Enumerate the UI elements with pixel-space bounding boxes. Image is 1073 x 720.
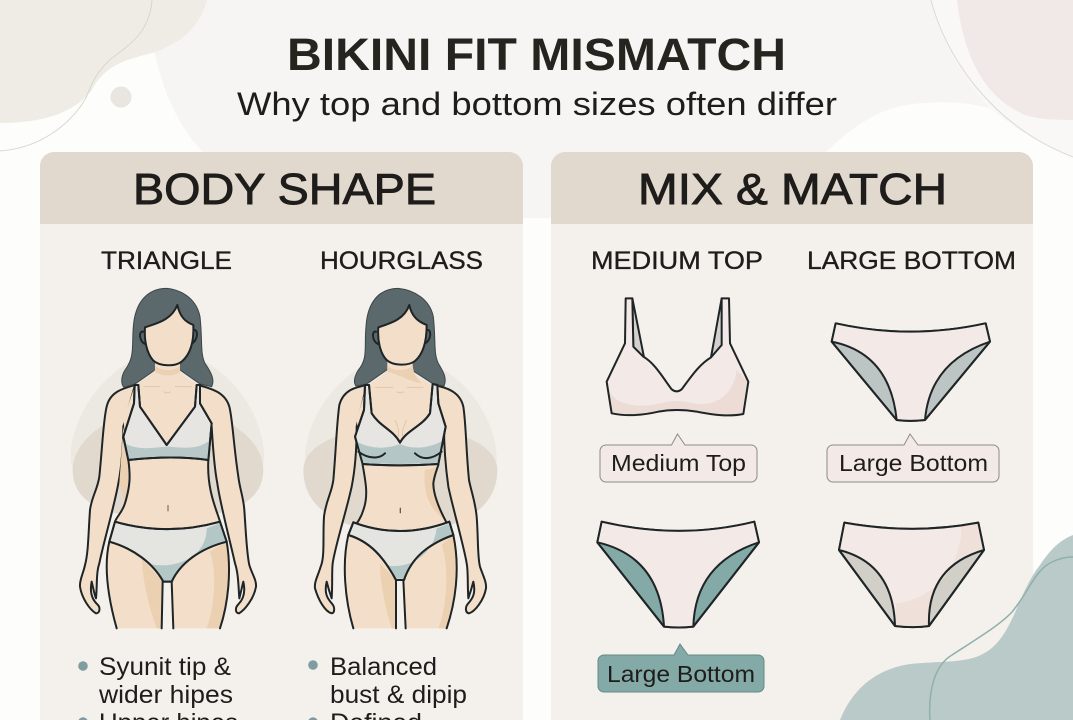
bullet list: hourglass: bust & dipip — [330, 681, 467, 709]
icon: medium bikini top — [607, 298, 748, 415]
title: BIKINI FIT MISMATCH — [287, 29, 786, 80]
callout: large bottom highlighted: Large Bottom — [607, 661, 755, 687]
heading: mix and match: MIX & MATCH — [638, 165, 947, 214]
hair — [355, 288, 445, 386]
bullet list: triangle: Syunit tip & — [99, 653, 231, 681]
icon: large bikini bottom grey — [832, 323, 990, 421]
panel: body shape — [40, 152, 523, 720]
face — [145, 305, 193, 365]
icon: bikini bottom neutral — [839, 523, 984, 627]
callout: large bottom highlighted — [598, 644, 764, 692]
figure: triangle body — [71, 288, 264, 628]
panel: mix and match — [551, 152, 1033, 720]
callout: large bottom: Large Bottom — [839, 450, 988, 476]
decorative teal blob — [840, 535, 1073, 720]
subtitle: Why top and bottom sizes often differ — [237, 86, 837, 122]
icon: large bikini bottom teal — [597, 522, 759, 627]
heading: body shape: BODY SHAPE — [133, 165, 436, 214]
face — [378, 305, 427, 365]
bikini bottom — [348, 522, 453, 580]
label: large bottom: LARGE BOTTOM — [807, 247, 1016, 275]
callout: large bottom — [827, 434, 999, 482]
bra — [123, 385, 212, 460]
label: medium top: MEDIUM TOP — [591, 247, 763, 275]
callout: medium top: Medium Top — [611, 450, 746, 476]
label: hourglass: HOURGLASS — [320, 247, 483, 275]
bra — [355, 384, 446, 465]
bullet list: hourglass — [308, 653, 467, 720]
bullet list: triangle: wider hipes — [98, 681, 233, 709]
bikini bottom — [109, 522, 227, 582]
bullet list: hourglass: Balanced — [330, 653, 437, 681]
callout: medium top — [600, 434, 757, 482]
hair — [122, 288, 213, 387]
bullet list: triangle — [78, 653, 238, 720]
label: triangle: TRIANGLE — [101, 247, 232, 275]
figure: hourglass body — [303, 288, 497, 628]
